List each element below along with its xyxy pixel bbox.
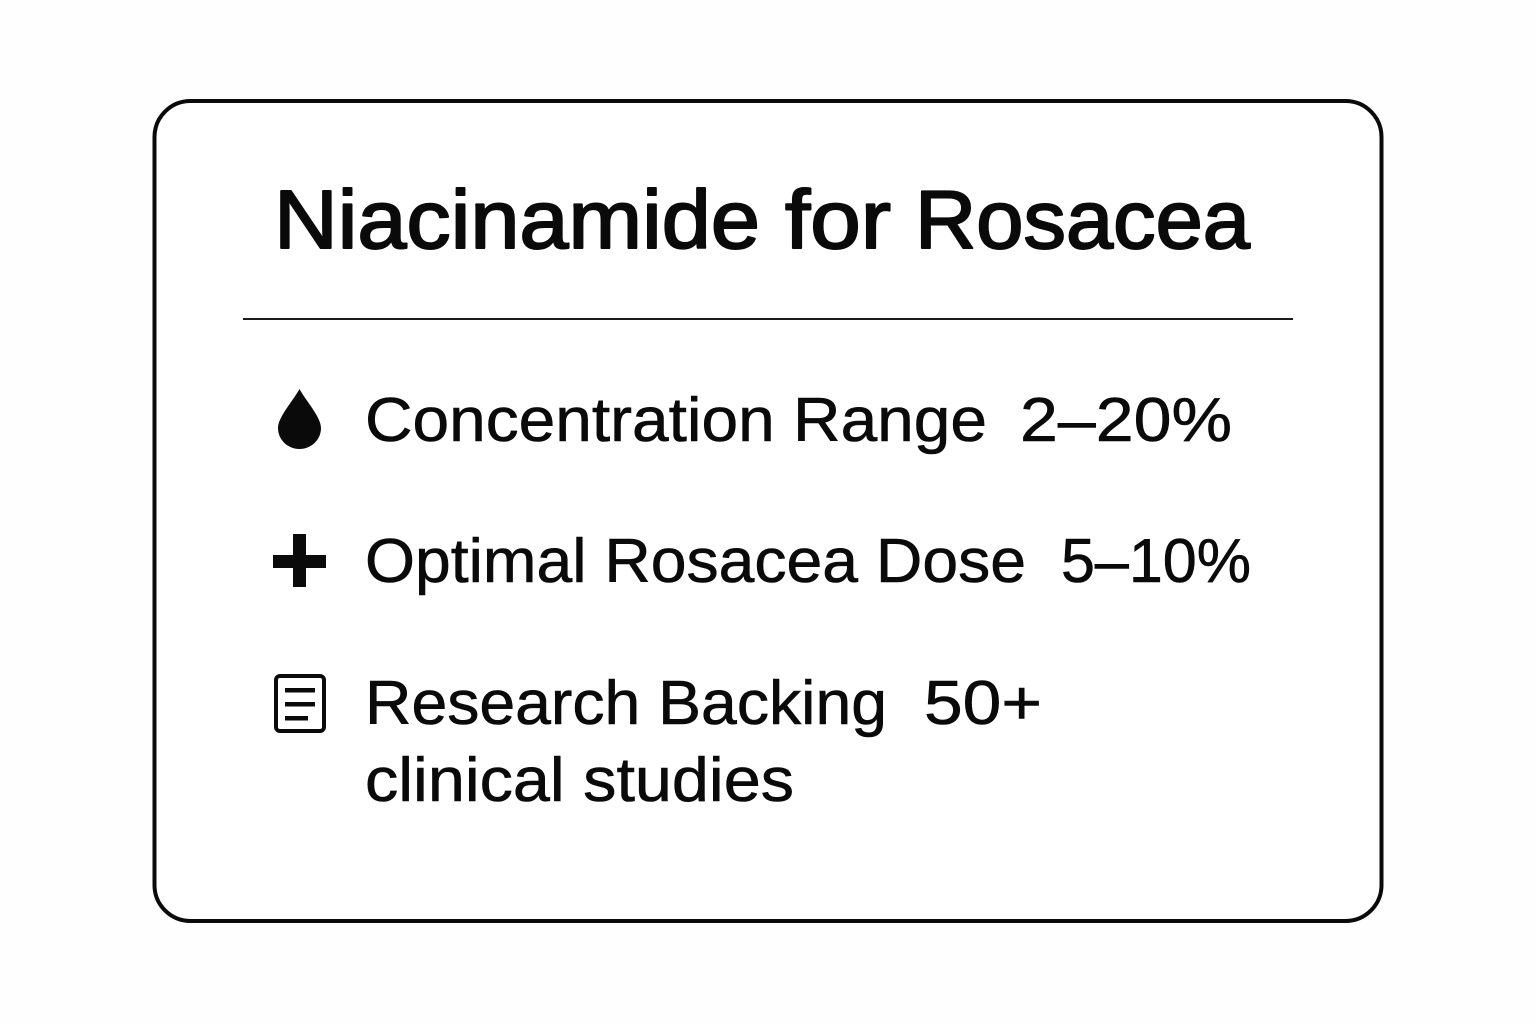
panel: card outline [154,101,1382,921]
icon: plus [273,534,326,587]
text: research backing: clinical studies [365,746,794,815]
text: research backing: 50+ [924,669,1042,738]
text: research backing [365,669,1042,815]
icon: water drop [278,389,321,449]
title: Niacinamide [274,173,760,266]
text: concentration range: Concentration Range [365,386,987,455]
icon: document [276,676,324,731]
text: concentration range: 2–20% [1020,386,1232,455]
title [274,173,1251,266]
text: optimal rosacea dose: Optimal Rosacea Dose [365,527,1026,596]
text: optimal rosacea dose: 5–10% [1061,527,1251,596]
text: concentration range [365,386,1232,455]
text: research backing: Research Backing [365,669,887,738]
title: Rosacea [915,173,1251,266]
title: for [785,173,891,266]
